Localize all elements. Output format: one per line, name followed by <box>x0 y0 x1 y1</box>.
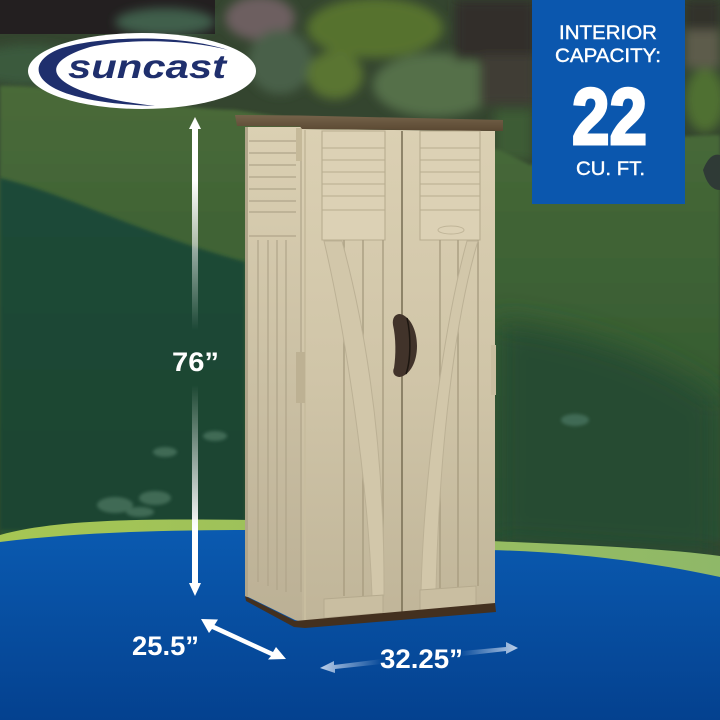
capacity value: 22 <box>572 72 647 161</box>
depth label: 25.5” <box>132 631 199 661</box>
capacity panel <box>532 0 685 204</box>
left door brace <box>324 241 384 596</box>
curved green band <box>0 520 720 590</box>
right kick plate <box>420 586 476 611</box>
shed base <box>245 596 496 628</box>
capacity label: INTERIOR <box>559 23 657 44</box>
width label: 32.25” <box>380 644 463 674</box>
height dimension arrow <box>189 117 201 596</box>
door grooves <box>344 240 478 596</box>
right door louvers <box>420 131 480 240</box>
capacity unit: CU. FT. <box>576 159 645 180</box>
right door brace <box>421 241 478 592</box>
shed roof <box>235 115 503 131</box>
height label: 76” <box>172 347 219 377</box>
capacity panel: CAPACITY: <box>555 46 661 67</box>
left door louvers <box>322 131 385 240</box>
logo: Suncast <box>28 33 256 109</box>
logo: Suncast: suncast <box>68 48 229 85</box>
depth dimension arrow <box>201 619 286 660</box>
shed <box>235 115 503 628</box>
door handle <box>393 314 417 377</box>
shed side panel <box>245 127 304 622</box>
left kick plate <box>324 595 383 618</box>
width dimension arrow <box>320 642 518 673</box>
shed front doors <box>296 129 496 622</box>
blue ground <box>0 530 720 720</box>
